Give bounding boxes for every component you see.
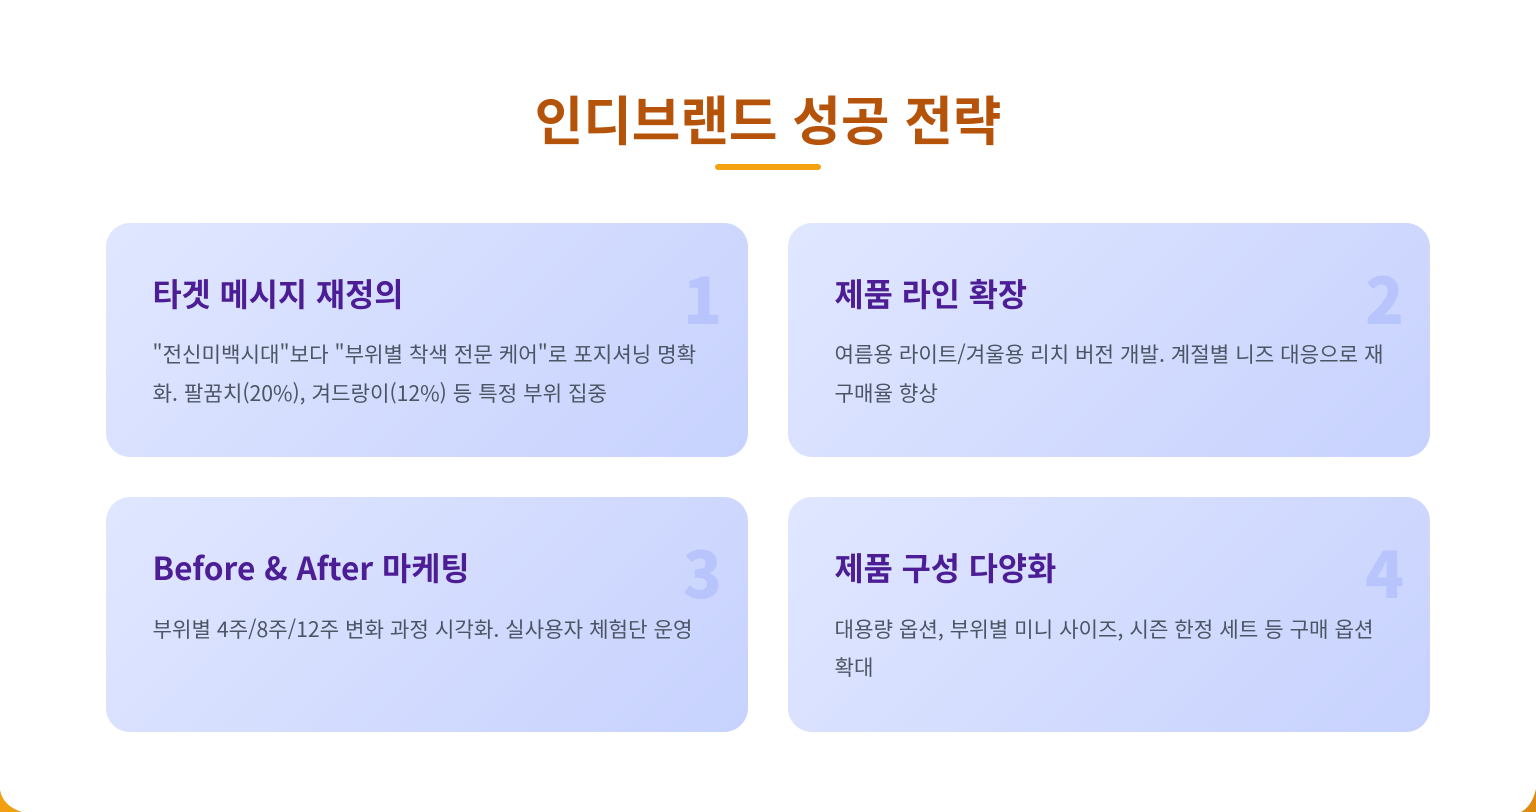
card 4 text: 대용량 옵션, 부위별 미니 사이즈, 시즌 한정 세트 등 구매 옵션 확대 — [834, 613, 1373, 682]
card 1 number: 1 — [683, 251, 722, 343]
card 4 number: 4 — [1365, 525, 1404, 617]
title: 인디브랜드 성공 전략 — [535, 80, 1001, 156]
card 2 heading: 제품 라인 확장 — [834, 270, 1027, 316]
card 4 heading: 제품 구성 다양화 — [834, 544, 1056, 590]
card 1 text: "전신미백시대"보다 "부위별 착색 전문 케어"로 포지셔닝 명확화. 팔꿈치(20%), 겨드랑이(12%) 등 특정 부위 집중 — [152, 338, 696, 408]
card 1 heading: 타겟 메시지 재정의 — [152, 270, 403, 316]
card 2 text: 여름용 라이트/겨울용 리치 버전 개발. 계절별 니즈 대응으로 재구매율 향상 — [834, 338, 1384, 408]
card 3 number: 3 — [683, 525, 722, 617]
card 2 number: 2 — [1365, 251, 1404, 343]
panel: card 3 — [106, 497, 748, 732]
panel: card 2 — [788, 223, 1430, 457]
card 3 heading: Before & After 마케팅 — [152, 544, 469, 590]
panel: card 1 — [106, 223, 748, 457]
panel: card 4 — [788, 497, 1430, 732]
title underline — [715, 164, 821, 170]
card 3 text: 부위별 4주/8주/12주 변화 과정 시각화. 실사용자 체험단 운영 — [152, 613, 692, 644]
